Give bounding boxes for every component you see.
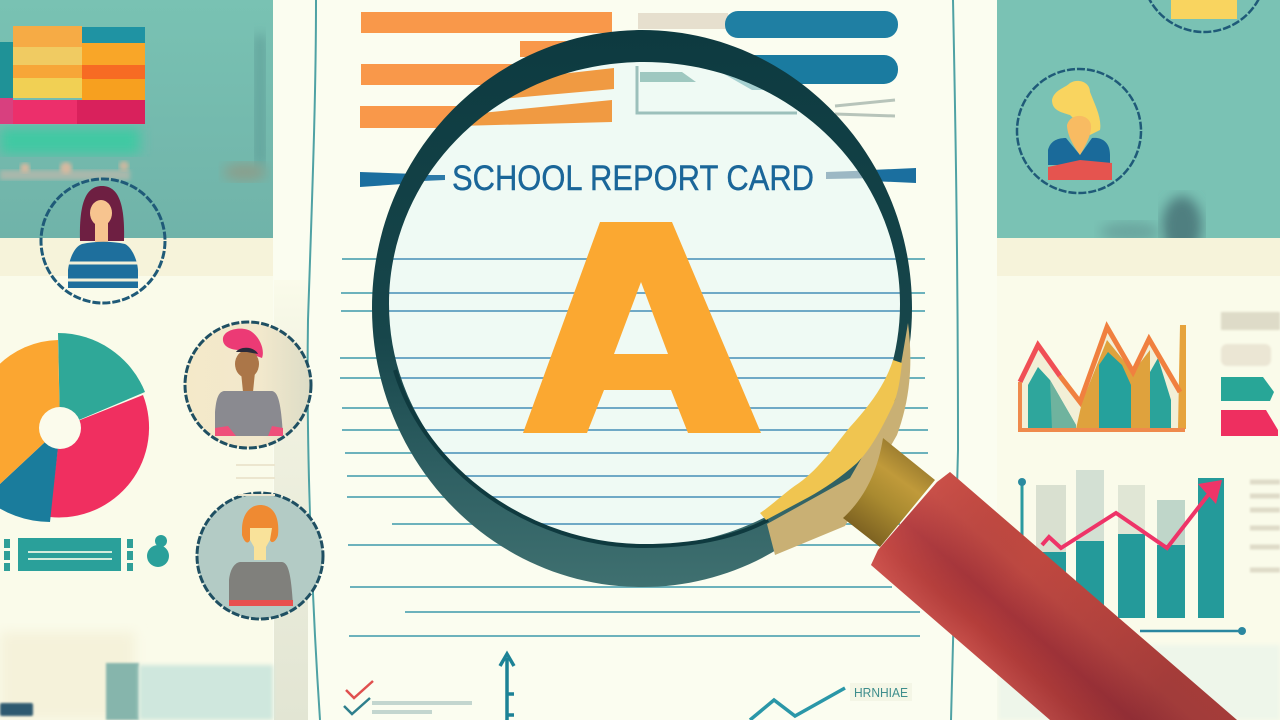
gold rim accent	[760, 360, 902, 520]
avatar: person with pink hair	[185, 322, 311, 448]
title: school report card: SCHOOL REPORT CARD	[452, 159, 814, 198]
report lines	[340, 259, 928, 636]
handle	[871, 472, 1237, 720]
panel: report paper	[273, 0, 997, 720]
pie chart	[0, 333, 149, 522]
area chart: right	[1020, 325, 1186, 430]
avatar: cropped top right	[1142, 0, 1266, 32]
avatar: person with orange hair	[197, 493, 323, 619]
lens	[380, 55, 910, 555]
lens rim	[372, 30, 912, 587]
inner rim shadow	[395, 370, 768, 546]
grade letter A	[523, 222, 761, 433]
small lines between avatars	[236, 465, 275, 495]
panel: right teal backdrop	[997, 0, 1280, 720]
avatar: person with blonde hair	[1017, 69, 1141, 193]
right legend chips	[1221, 312, 1280, 436]
bar chart: top of paper	[360, 11, 898, 128]
bar chart: left stacked blocks	[0, 26, 145, 124]
left bottom blurred blocks	[0, 632, 273, 720]
bar chart with trend arrow	[1018, 470, 1280, 635]
handle shading	[871, 472, 1237, 720]
avatar: woman in striped top	[41, 179, 165, 303]
footer marks on paper	[344, 654, 912, 720]
tan rim section	[767, 323, 910, 555]
magnifying glass	[372, 30, 1237, 720]
brass collar	[843, 438, 935, 547]
panel: left teal backdrop	[0, 0, 273, 276]
footer marks on paper: HRNHIAE	[854, 685, 908, 700]
left legend strip	[7, 535, 169, 571]
heading ribbons	[360, 168, 916, 187]
